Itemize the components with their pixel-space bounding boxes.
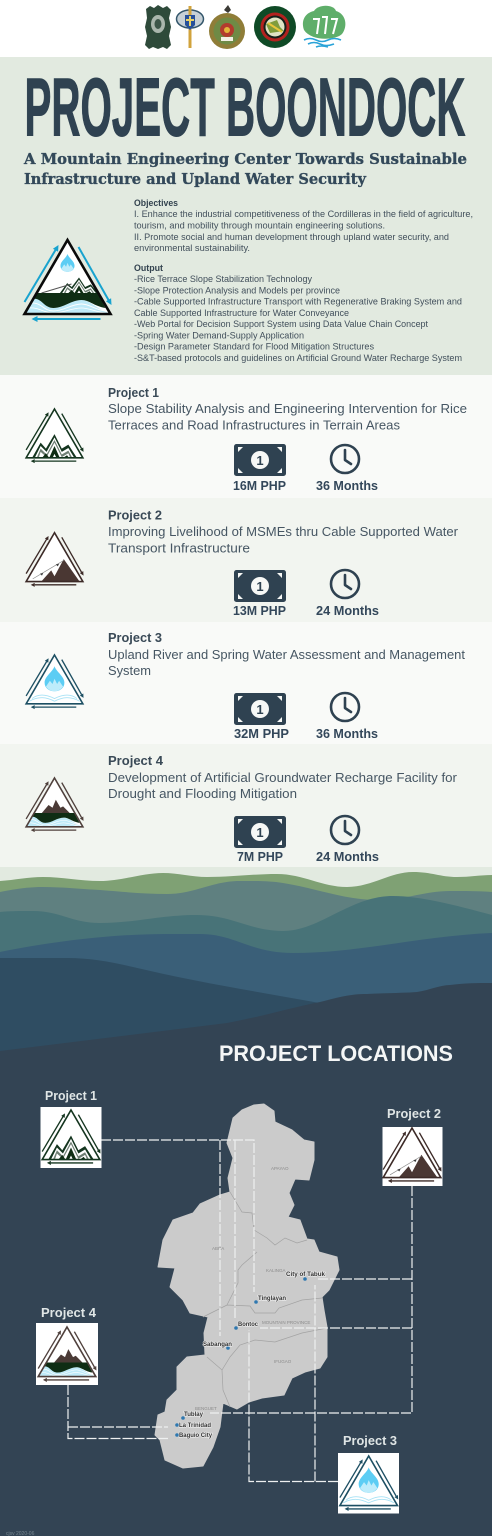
text block: project 3 description <box>108 647 465 678</box>
duration value: 24 Months <box>316 604 379 618</box>
text block: output: -Cable Supported Infrastructure Transport with Regenerative Braking System and <box>134 296 462 306</box>
connector lines: project 1 <box>101 1140 254 1336</box>
heading: project locations: PROJECT LOCATIONS <box>219 1041 453 1066</box>
text block: project 2 description: Transport Infrastructure <box>108 540 250 556</box>
text block: objectives: II. Promote social and human development through upland water security, and <box>134 232 449 242</box>
text block: project 2 description: Improving Livelihood of MSMEs thru Cable Supported Water <box>108 524 459 539</box>
text block: project 1 description <box>108 401 467 432</box>
heading: project 1: Project 1 <box>108 386 159 400</box>
icon: project 3 card <box>340 1456 398 1511</box>
map labels: provinces <box>195 1166 310 1411</box>
budget value: 16M PHP <box>233 479 286 493</box>
text block: output: -Design Parameter Standard for Flood Mitigation Structures <box>134 342 375 352</box>
duration value: 24 Months <box>316 850 379 864</box>
duration value: 36 Months <box>316 479 378 493</box>
map: cordillera region <box>155 1104 339 1468</box>
map labels: towns: City of Tabuk <box>286 1272 326 1278</box>
icon: project 3 water drop <box>26 655 84 709</box>
map labels: towns: Tublay <box>184 1412 204 1418</box>
location card: project 2: Project 2 <box>387 1106 441 1121</box>
text block: project 1 description: Terraces and Road Infrastructures in Terrain Areas <box>108 418 401 432</box>
map labels: towns: Bontoc <box>238 1322 259 1328</box>
icon: project 2 cable <box>26 533 84 587</box>
icon: budget <box>234 444 286 476</box>
text block: project 2 description <box>108 524 459 556</box>
icon: duration <box>331 445 359 473</box>
mountain wave layers <box>0 867 492 1536</box>
icon: project 4 card <box>38 1327 96 1382</box>
icon: main triangle emblem <box>24 240 112 322</box>
map labels: towns: Baguio City <box>179 1433 213 1439</box>
icon: budget: 1 <box>256 825 264 840</box>
text block: objectives: environmental sustainability. <box>134 243 250 253</box>
panel: project 1 <box>0 375 492 498</box>
icon: budget <box>234 816 286 848</box>
connector lines: project 3 <box>249 1285 338 1482</box>
text block: output: -Web Portal for Decision Support System using Data Value Chain Concept <box>134 319 428 329</box>
text block: project 3 description: Upland River and Spring Water Assessment and Management <box>108 647 465 662</box>
text block: output: -S&T-based protocols and guidelines on Artificial Ground Water Recharge System <box>134 353 462 363</box>
panel: project 4 <box>0 744 492 867</box>
budget value: 7M PHP <box>237 850 283 864</box>
location card: project 3 <box>338 1433 399 1514</box>
text block: project 4 description: Development of Artificial Groundwater Recharge Facility for <box>108 770 458 785</box>
location card: project 1 <box>40 1088 102 1168</box>
location card: project 1: Project 1 <box>45 1088 97 1103</box>
logo: scroll seal <box>145 5 171 49</box>
panel: project 2 <box>0 498 492 622</box>
icon: budget: 1 <box>256 453 264 468</box>
duration value: 36 Months <box>316 727 378 741</box>
budget value: 13M PHP <box>233 604 286 618</box>
map labels: provinces: ABRA <box>212 1246 224 1251</box>
map labels: provinces: KALINGA <box>266 1268 286 1273</box>
map labels: provinces: IFUGAO <box>274 1359 292 1364</box>
map labels: towns <box>175 1272 326 1439</box>
budget value: 32M PHP <box>234 727 289 741</box>
panel: header <box>0 57 492 375</box>
location card: project 4: Project 4 <box>41 1305 97 1320</box>
logo: state medal <box>209 5 245 49</box>
icon: budget: 1 <box>256 579 264 594</box>
text block: output: Output <box>134 263 163 273</box>
text block: output: Cable Supported Infrastructure for Water Conveyance <box>134 308 349 318</box>
logo row <box>145 5 345 49</box>
icon: project 2 card <box>383 1128 441 1183</box>
heading: project 3: Project 3 <box>108 631 162 645</box>
heading: project 2: Project 2 <box>108 508 162 522</box>
text block: project 1 description: Slope Stability Analysis and Engineering Intervention for Rice <box>108 401 467 416</box>
text block: output: -Slope Protection Analysis and Models per province <box>134 286 340 296</box>
logo: green and red circular seal <box>254 6 296 48</box>
location card: project 4 <box>36 1305 98 1385</box>
connector lines: project 2 <box>210 1186 412 1413</box>
text block: output: -Rice Terrace Slope Stabilization Technology <box>134 274 312 284</box>
text block: output: -Spring Water Demand-Supply Application <box>134 330 304 340</box>
logo: sword and shield <box>176 6 204 48</box>
connector lines: project 4 <box>68 1385 168 1438</box>
logo: tree and water <box>303 6 345 47</box>
text block: objectives: tourism, and mobility through mountain engineering solutions. <box>134 220 385 230</box>
icon: project 1 mountains <box>26 409 84 463</box>
map labels: provinces: BENGUET <box>195 1406 217 1411</box>
map labels: towns: La Trinidad <box>179 1423 211 1429</box>
text block: output <box>134 263 462 363</box>
icon: budget: 1 <box>256 702 264 717</box>
text block: project 4 description <box>108 770 458 801</box>
icon: budget <box>234 570 286 602</box>
panel: project 3 <box>0 622 492 744</box>
icon: project 4 recharge <box>26 778 84 832</box>
icon: duration <box>331 816 359 844</box>
location card: project 2 <box>382 1106 442 1186</box>
map labels: provinces: APAYAO <box>271 1166 289 1171</box>
heading: project 4: Project 4 <box>108 754 163 768</box>
subtitle: Infrastructure and Upland Water Security <box>24 170 367 188</box>
icon: duration <box>331 693 359 721</box>
text block: objectives: Objectives <box>134 198 178 208</box>
icon: duration <box>331 570 359 598</box>
map labels: towns: Sabangan <box>203 1342 232 1348</box>
text block: project 3 description: System <box>108 663 151 678</box>
map labels: towns: Tinglayan <box>258 1296 286 1302</box>
map labels: provinces: MOUNTAIN PROVINCE <box>262 1320 310 1325</box>
text block: project 4 description: Drought and Flooding Mitigation <box>108 786 297 801</box>
icon: budget <box>234 693 286 725</box>
subtitle: A Mountain Engineering Center Towards Sustainable <box>23 150 467 168</box>
icon: project 1 card <box>42 1110 100 1165</box>
text block: objectives <box>134 198 473 253</box>
text block: objectives: I. Enhance the industrial competitiveness of the Cordilleras in the field of agriculture, <box>134 209 473 219</box>
subtitle <box>23 150 467 188</box>
location card: project 3: Project 3 <box>343 1433 397 1448</box>
